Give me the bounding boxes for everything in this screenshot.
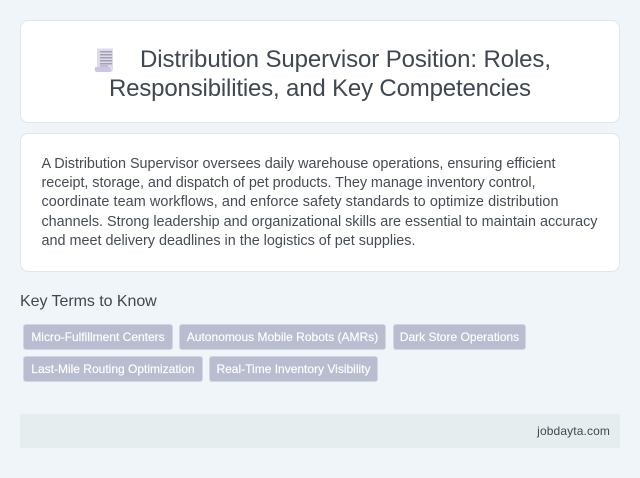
panel: title card	[20, 20, 620, 123]
footer source text: jobdayta.com	[537, 424, 610, 438]
panel: description card	[20, 133, 620, 272]
tag: Dark Store Operations	[400, 330, 519, 344]
title	[109, 46, 551, 102]
footer bar	[20, 414, 620, 448]
heading: key terms: Key Terms to Know	[20, 293, 157, 310]
tag: Real-Time Inventory Visibility	[216, 362, 371, 376]
tag	[179, 324, 386, 350]
title: Responsibilities, and Key Competencies	[109, 75, 531, 102]
description text: receipt, storage, and dispatch of pet products. They manage inventory control,	[42, 175, 536, 191]
tag	[393, 324, 526, 350]
tag: Micro-Fulfillment Centers	[31, 330, 165, 344]
description text: and meet delivery deadlines in the logistics of pet supplies.	[42, 233, 416, 249]
description text: channels. Strong leadership and organizational skills are essential to maintain accuracy	[42, 214, 598, 230]
icon: paper scroll	[94, 48, 113, 72]
tag list	[23, 324, 526, 382]
tag: Autonomous Mobile Robots (AMRs)	[187, 330, 378, 344]
description text: coordinate team workflows, and enforce safety standards to optimize distribution	[42, 194, 558, 210]
description text: A Distribution Supervisor oversees daily warehouse operations, ensuring efficient	[42, 156, 556, 172]
tag	[23, 324, 173, 350]
tag	[209, 356, 378, 382]
description text	[42, 156, 598, 249]
tag	[23, 356, 203, 382]
title: Distribution Supervisor Position: Roles,	[140, 46, 551, 73]
tag: Last-Mile Routing Optimization	[31, 362, 195, 376]
